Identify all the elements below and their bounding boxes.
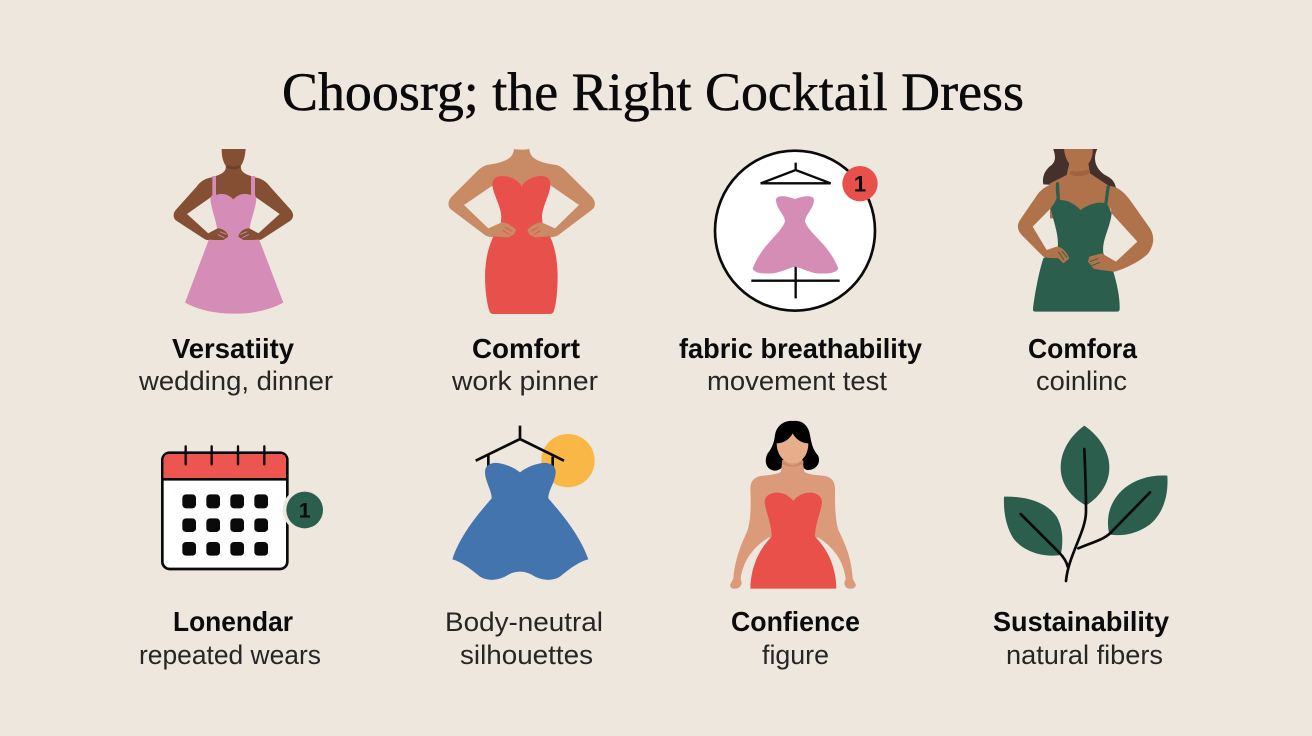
badge: number 1 [842, 166, 878, 201]
icon: woman in green dress [1018, 149, 1153, 312]
icon: plant with three leaves [1004, 426, 1168, 581]
subtext: wedding, dinner: wedding, dinner [138, 366, 333, 396]
panel: body-neutral silhouettes [445, 426, 603, 670]
panel: fabric breathability [679, 151, 922, 396]
icon: woman in pink flared dress [174, 149, 293, 314]
panel: sustainability [993, 426, 1169, 670]
icon: calendar with badge [162, 446, 327, 569]
subtext: repeated wears: repeated wears [139, 640, 321, 670]
heading: Body-neutral: Body-neutral [445, 607, 603, 637]
panel: calendar [139, 446, 327, 670]
panel: comfort [448, 149, 598, 396]
badge: number 1 [283, 488, 327, 532]
icon: dress on hanger in circle [715, 151, 878, 311]
heading: Comfora: Comfora [1028, 333, 1137, 364]
heading: Sustainability: Sustainability [993, 606, 1169, 637]
icon: blue dress on hanger with sun [452, 426, 595, 580]
badge: number 1: 1 [299, 499, 311, 523]
icon: woman in red fitted dress [448, 149, 595, 314]
subtext: figure: figure [762, 640, 829, 670]
subtext: movement test: movement test [707, 366, 887, 396]
subtext: work pinner: work pinner [451, 366, 598, 396]
subtext: silhouettes: silhouettes [460, 640, 593, 670]
heading: Confience: Confience [731, 606, 860, 637]
panel: confidence [730, 421, 860, 670]
subtext: coinlinc: coinlinc [1036, 366, 1127, 396]
title: Choosrg; the Right Cocktail Dress [282, 62, 1024, 122]
heading: Lonendar: Lonendar [173, 606, 293, 637]
heading: Versatiity: Versatiity [172, 333, 294, 364]
icon: woman with black hair in red dress [730, 421, 856, 589]
badge: number 1: 1 [854, 172, 866, 197]
panel: versatility [138, 149, 333, 396]
subtext: natural fibers: natural fibers [1006, 640, 1163, 670]
heading: Comfort: Comfort [472, 333, 580, 364]
heading: fabric breathability: fabric breathability [679, 333, 922, 364]
panel: comfora [1018, 149, 1153, 396]
